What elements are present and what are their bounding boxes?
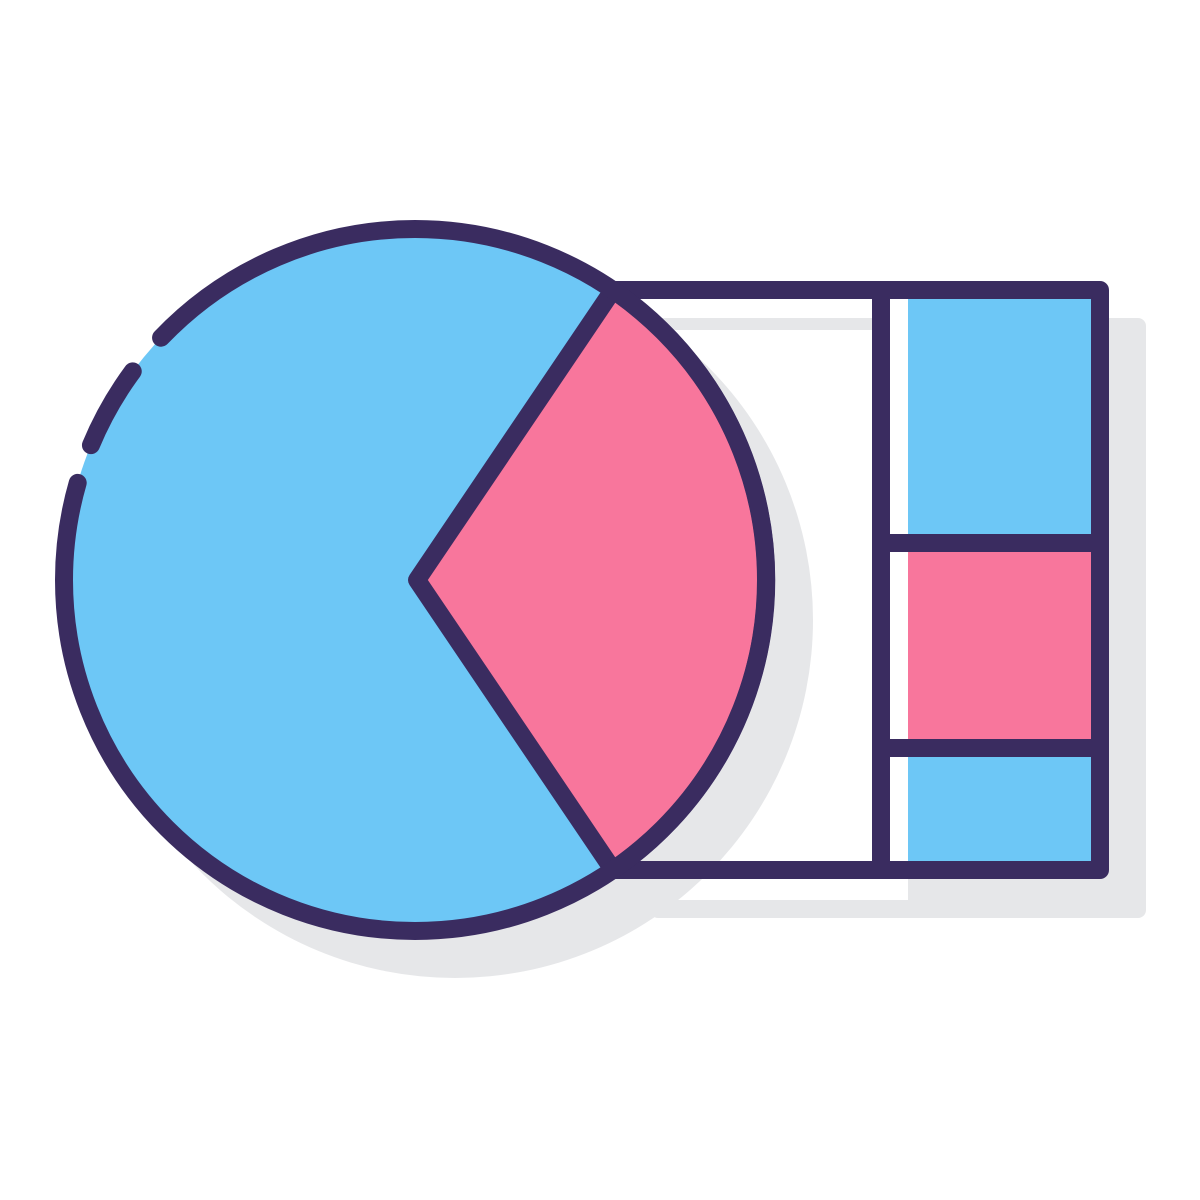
legend box white paper bbox=[640, 330, 908, 900]
shadow: pie circle bbox=[97, 262, 813, 978]
legend box bbox=[610, 290, 1100, 870]
pie chart bbox=[64, 229, 766, 931]
pie outline with gaps bbox=[64, 229, 766, 931]
pie slice: pink bbox=[417, 290, 766, 870]
shadow: legend box bbox=[650, 318, 1146, 918]
